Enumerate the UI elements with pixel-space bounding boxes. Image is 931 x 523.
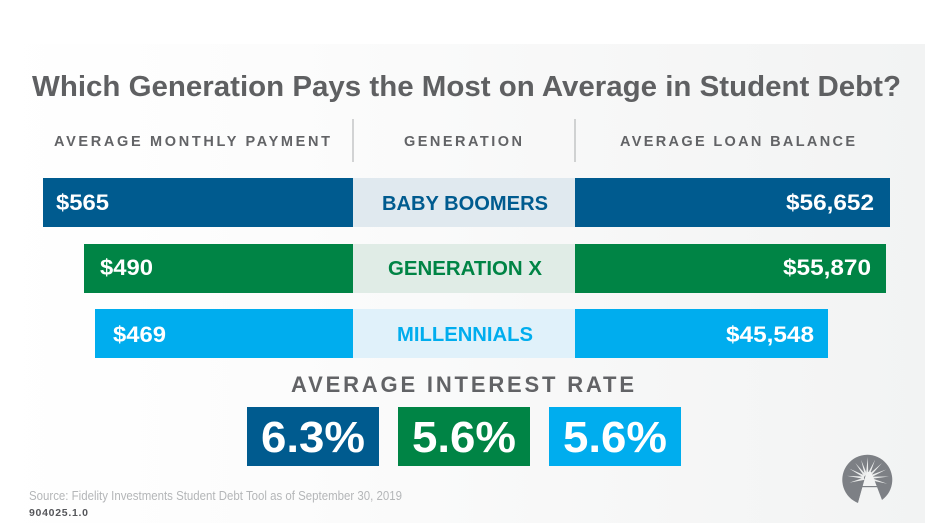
- row: millennials: [95, 309, 828, 358]
- row: millennials: $45,548: [726, 322, 814, 347]
- rate box: millennials: 5.6%: [563, 413, 667, 462]
- rate box: millennials: [549, 407, 681, 466]
- rate box: baby boomers: [247, 407, 379, 466]
- document code: 904025.1.0: [29, 507, 88, 519]
- rate box: baby boomers: 6.3%: [261, 413, 365, 462]
- row: baby boomers: BABY BOOMERS: [382, 192, 548, 215]
- icon: pyramid logo: [842, 455, 892, 503]
- row: generation x: $490: [100, 255, 153, 280]
- column headers: [54, 119, 855, 162]
- interest rate heading: AVERAGE INTEREST RATE: [291, 372, 634, 397]
- rate box: generation x: 5.6%: [412, 413, 516, 462]
- row: millennials: $469: [113, 322, 166, 347]
- header: average monthly payment: AVERAGE MONTHLY PAYMENT: [54, 134, 330, 150]
- row: baby boomers: $56,652: [786, 190, 874, 215]
- header: generation: GENERATION: [404, 134, 522, 150]
- rate box: generation x: [398, 407, 530, 466]
- row: generation x: $55,870: [783, 255, 871, 280]
- title: Which Generation Pays the Most on Average in Student Debt?: [32, 71, 901, 103]
- row: millennials: MILLENNIALS: [397, 323, 533, 346]
- row: baby boomers: $565: [56, 190, 109, 215]
- row: baby boomers: [43, 178, 890, 227]
- source note: Source: Fidelity Investments Student Debt Tool as of September 30, 2019: [29, 489, 402, 503]
- header: average loan balance: AVERAGE LOAN BALANCE: [620, 134, 855, 150]
- row: generation x: GENERATION X: [388, 257, 542, 280]
- row: generation x: [84, 244, 886, 293]
